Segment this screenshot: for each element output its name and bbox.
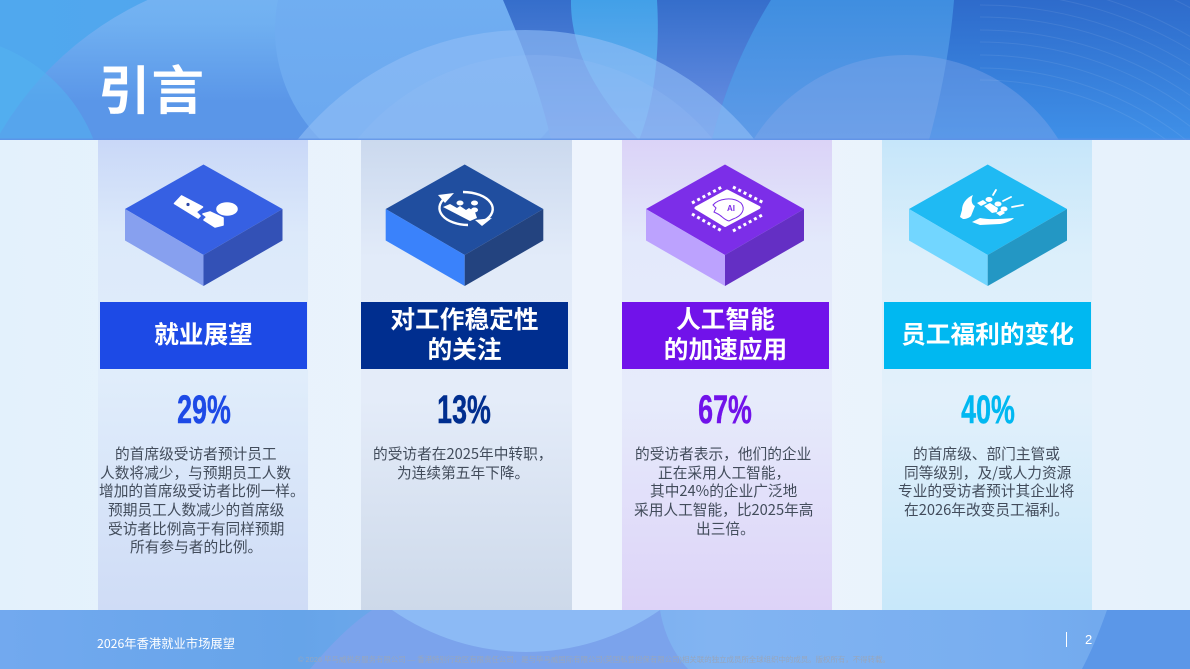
text: AI adoption description: 其中24%的企业广泛地 — [650, 480, 797, 501]
text: benefits change description: 在2026年改变员工福利。 — [904, 499, 1069, 520]
stat: 29%: 29% — [177, 388, 230, 432]
panel: AI adoption — [622, 140, 832, 610]
icon: block with AI chip — [646, 164, 804, 286]
page number — [1066, 632, 1097, 647]
text: AI adoption description: 采用人工智能，比2025年高 — [634, 499, 813, 520]
heading: AI adoption: 人工智能 — [676, 306, 775, 334]
text: benefits change description: 的首席级、部门主管或 — [913, 443, 1060, 464]
heading: benefits change: 员工福利的变化 — [901, 322, 1074, 348]
text: job stability description — [373, 443, 552, 483]
heading: job stability: 对工作稳定性 — [390, 306, 539, 334]
text: AI adoption description: 正在采用人工智能， — [658, 462, 790, 483]
icon: block with circular arrows and people — [386, 164, 544, 286]
text: employment outlook description: 预期员工人数减少的首席级 — [108, 499, 284, 520]
icon: block with AI chip: AI — [727, 204, 735, 213]
stat: 13%: 13% — [437, 388, 491, 432]
text: job stability description: 的受访者在2025年中转职， — [373, 443, 552, 464]
text: AI adoption description — [634, 443, 813, 539]
text: employment outlook description: 增加的首席级受访者比例一样。 — [99, 480, 305, 501]
heading: benefits change — [884, 302, 1091, 369]
icon: block with person at laptop — [125, 164, 282, 286]
panel: job stability — [361, 140, 572, 610]
text: job stability description: 为连续第五年下降。 — [397, 462, 529, 483]
text: employment outlook description: 所有参与者的比例。 — [130, 536, 262, 557]
text: AI adoption description: 出三倍。 — [696, 518, 755, 539]
heading: job stability: 的关注 — [427, 336, 502, 364]
text: benefits change description — [898, 443, 1074, 520]
text: employment outlook description: 受访者比例高于有同样预期 — [108, 518, 284, 539]
text: employment outlook description: 的首席级受访者预计员工 — [115, 443, 277, 464]
heading: job stability — [361, 302, 568, 369]
heading: employment outlook: 就业展望 — [154, 322, 253, 348]
stat: 40%: 40% — [961, 388, 1015, 432]
text: benefits change description: 专业的受访者预计其企业将 — [898, 480, 1074, 501]
stat: 67%: 67% — [698, 388, 751, 432]
copyright line: © 2026 毕马威税务服务有限公司 — 香港特别行政区有限责任公司，是与毕马威国际有限公司(英国私营担保有限公司)相关联的独立成员所全球组织中的成员。版权所有，不得转载。 — [298, 655, 890, 664]
icon: block with hands and sparkles — [909, 164, 1067, 286]
heading: employment outlook — [100, 302, 307, 369]
heading: AI adoption: 的加速应用 — [664, 336, 787, 364]
heading: AI adoption — [622, 302, 829, 369]
panel: benefits change — [882, 140, 1092, 610]
panel: employment outlook — [98, 140, 308, 610]
title: 引言 — [98, 62, 205, 121]
text: employment outlook description: 人数将减少，与预期员工人数 — [100, 462, 291, 483]
page number: 2 — [1085, 632, 1092, 647]
text: benefits change description: 同等级别，及/或人力资源 — [904, 462, 1071, 483]
footer title: 2026年香港就业市场展望 — [97, 634, 235, 652]
text: employment outlook description — [99, 443, 305, 557]
text: AI adoption description: 的受访者表示，他们的企业 — [635, 443, 811, 464]
